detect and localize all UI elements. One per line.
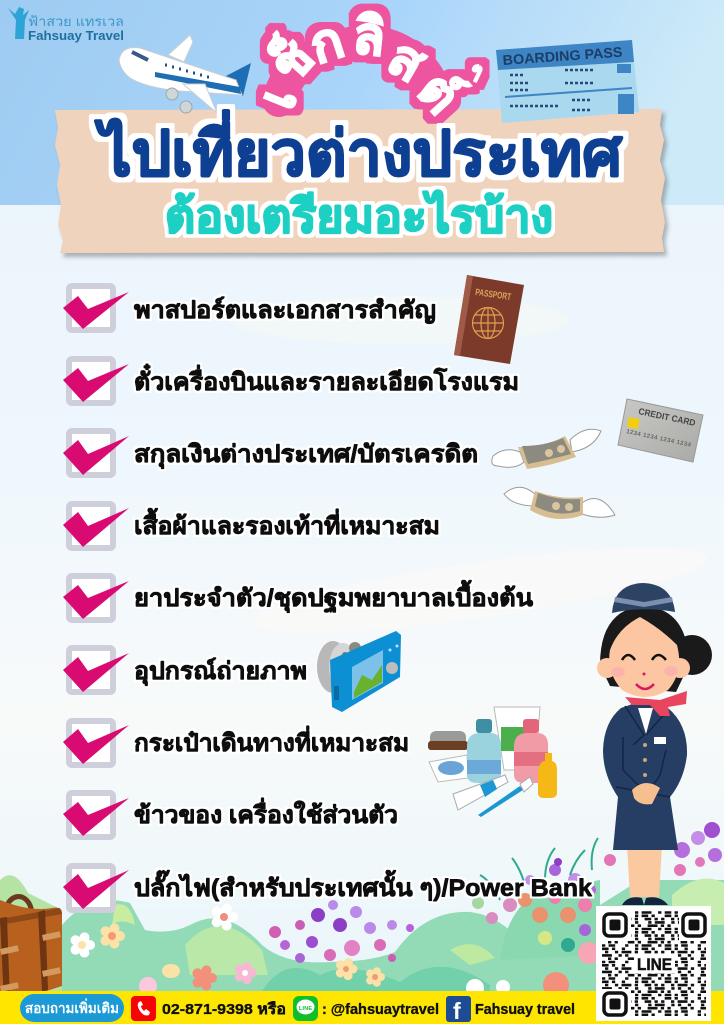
scarf — [625, 691, 687, 716]
badge title: pink arc heading: ๆ — [467, 59, 486, 83]
face — [597, 617, 690, 697]
badge title: pink arc heading — [248, 6, 486, 125]
item 5 — [63, 576, 534, 620]
icon: boarding pass: BOARDING PASS — [502, 44, 623, 68]
QR data modules — [602, 912, 706, 1015]
icon: toiletries — [428, 707, 557, 817]
Facebook name: Fahsuay travel — [475, 1001, 575, 1018]
item 7 — [63, 721, 409, 765]
main title: ไปเที่ยวต่างประเทศ — [94, 110, 624, 189]
item 9 — [63, 866, 593, 910]
uniform — [603, 700, 687, 850]
subtitle: ต้องเตรียมอะไรบ้าง — [165, 190, 553, 242]
item 4: เสื้อผ้าและรองเท้าที่เหมาะสม — [134, 507, 440, 540]
icon: Facebook — [446, 996, 471, 1024]
item 9: ปลั๊กไฟ(สำหรับประเทศนั้น ๆ)/Power Bank — [134, 869, 593, 902]
suitcase — [0, 897, 62, 1006]
icon: camera — [317, 631, 401, 712]
logo: Fahsuay Travel — [28, 28, 124, 43]
QR code LINE — [596, 906, 711, 1021]
QR center label: LINE — [637, 955, 672, 974]
icon: phone — [131, 996, 156, 1021]
item 1: พาสปอร์ตและเอกสารสำคัญ — [134, 296, 436, 324]
flowers in the garden — [74, 908, 600, 998]
item 2 — [63, 359, 519, 403]
icon: airplane — [119, 35, 251, 113]
purple flower cluster — [269, 900, 414, 963]
icon: credit card: CREDIT CARD — [638, 406, 697, 428]
checklist — [63, 286, 593, 910]
badge title: pink arc heading: ต์ — [406, 61, 472, 125]
contact bar — [20, 994, 575, 1024]
torn paper tape banner — [55, 109, 665, 253]
flower field right — [472, 858, 600, 960]
hair and bun — [600, 606, 712, 692]
badge title: pink arc heading: เ — [248, 79, 308, 117]
icon: credit card — [618, 399, 703, 462]
item 1 — [63, 286, 436, 330]
icon: Facebook: f — [453, 998, 461, 1024]
badge title: pink arc heading: ช็ — [257, 27, 326, 94]
icon: passport: PASSPORT — [475, 287, 512, 303]
QR finder patterns — [604, 914, 705, 1015]
footer band — [0, 991, 724, 1024]
item 2: ตั๋วเครื่องบินและรายละเอียดโรงแรม — [134, 363, 519, 396]
icon: credit card: 1234 1234 1234 1234 — [626, 429, 692, 449]
garden illustration — [0, 822, 724, 998]
icon: LINE — [293, 996, 318, 1021]
badge title: pink arc heading: ลิ — [350, 6, 388, 68]
icon: boarding pass — [496, 40, 639, 123]
icon: LINE: LINE — [299, 1006, 312, 1012]
flight attendant — [597, 583, 712, 905]
LINE handle: : @fahsuaytravel — [322, 1001, 439, 1018]
item 6 — [63, 648, 307, 692]
hat — [612, 583, 675, 613]
logo — [8, 7, 124, 43]
item 3 — [63, 431, 478, 475]
legs — [622, 845, 668, 905]
phone number: 02-871-9398 หรือ — [162, 1001, 286, 1018]
icon: flying banknote — [492, 429, 601, 469]
logo: ฟ้าสวย แทรเวล — [28, 14, 124, 29]
badge title: pink arc heading: ส — [378, 28, 435, 94]
item 4 — [63, 504, 440, 548]
pill label: สอบถามเพิ่มเติม — [25, 998, 119, 1016]
pill label — [20, 994, 124, 1022]
item 6: อุปกรณ์ถ่ายภาพ — [134, 657, 307, 687]
item 8 — [63, 793, 398, 837]
item 3: สกุลเงินต่างประเทศ/บัตรเครดิต — [134, 441, 478, 470]
badge title: pink arc heading: ก — [303, 11, 351, 75]
item 8: ข้าวของ เครื่องใช้ส่วนตัว — [134, 797, 398, 829]
icon: passport — [454, 275, 524, 364]
item 5: ยาประจำตัว/ชุดปฐมพยาบาลเบื้องต้น — [134, 579, 534, 614]
icon: flying banknote — [504, 487, 615, 519]
item 7: กระเป๋าเดินทางที่เหมาะสม — [134, 725, 409, 757]
icon: traveller silhouette — [8, 7, 29, 39]
